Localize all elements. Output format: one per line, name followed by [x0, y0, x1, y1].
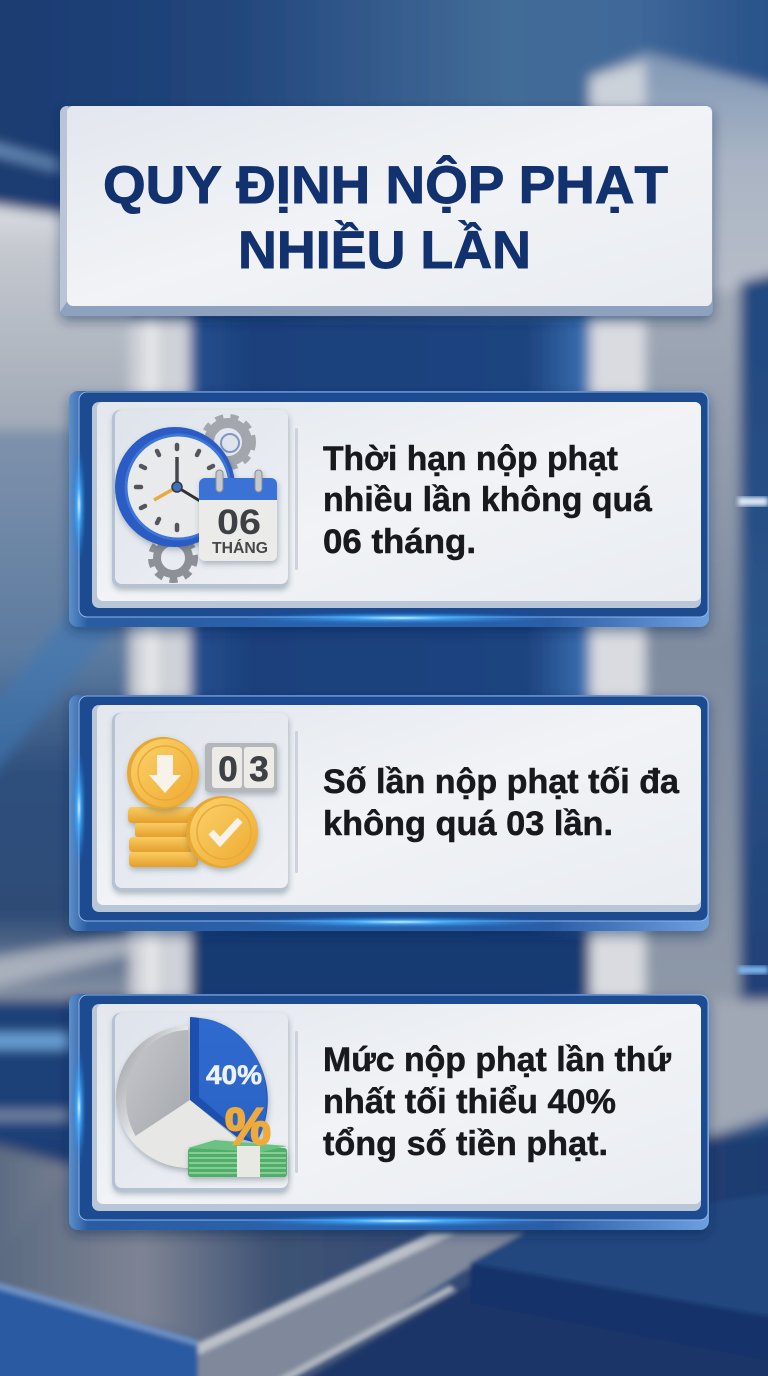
card 3 text	[323, 1041, 671, 1163]
card 3 icon tile	[112, 1013, 288, 1191]
icon: coin with check	[186, 796, 258, 868]
title text: QUY ĐỊNH NỘP PHẠT	[103, 154, 668, 215]
icon: money stack	[188, 1140, 287, 1177]
icon: coin with down arrow	[127, 737, 199, 809]
card 1: time limit	[69, 391, 709, 627]
card 3 text: tổng số tiền phạt.	[323, 1125, 608, 1163]
card 1 text: 06 tháng.	[323, 523, 476, 561]
title panel	[60, 106, 713, 316]
title text: NHIỀU LẦN	[238, 220, 531, 280]
title text	[103, 154, 668, 280]
card 2 text: không quá 03 lần.	[323, 805, 613, 843]
icon: flip counter 03	[205, 743, 277, 792]
card 3 text: Mức nộp phạt lần thứ	[323, 1041, 671, 1079]
card 1 icon tile	[112, 410, 288, 587]
card 2: number of payments	[69, 695, 709, 931]
icon: pie chart 40%: 40%	[206, 1060, 262, 1090]
icon: calendar 06 tháng: THÁNG	[212, 540, 268, 557]
icon: gear bottom	[151, 536, 195, 580]
icon: clock	[115, 427, 235, 547]
icon: flip counter 03: 3	[249, 750, 269, 789]
card 2 icon tile	[112, 713, 288, 891]
card 2 frame	[69, 695, 709, 931]
card 1 text: nhiều lần không quá	[323, 481, 652, 519]
card 1 text: Thời hạn nộp phạt	[323, 440, 618, 478]
card 1 frame	[69, 391, 709, 627]
icon: calendar 06 tháng: 06	[217, 503, 261, 542]
card 1 text	[323, 440, 652, 561]
card 2 text: Số lần nộp phạt tối đa	[323, 763, 680, 801]
icon: gear top	[203, 417, 253, 467]
icon: pie chart 40%	[116, 1017, 268, 1168]
icon: flip counter 03: 0	[218, 750, 238, 789]
card 2 text	[323, 763, 680, 843]
card 3 text: nhất tối thiểu 40%	[323, 1083, 616, 1121]
card 3: first payment minimum	[69, 994, 709, 1230]
card 3 frame	[69, 994, 709, 1230]
icon: calendar 06 tháng	[199, 470, 277, 561]
icon: coin stack	[128, 807, 198, 867]
icon: percent sign: %	[225, 1098, 271, 1156]
